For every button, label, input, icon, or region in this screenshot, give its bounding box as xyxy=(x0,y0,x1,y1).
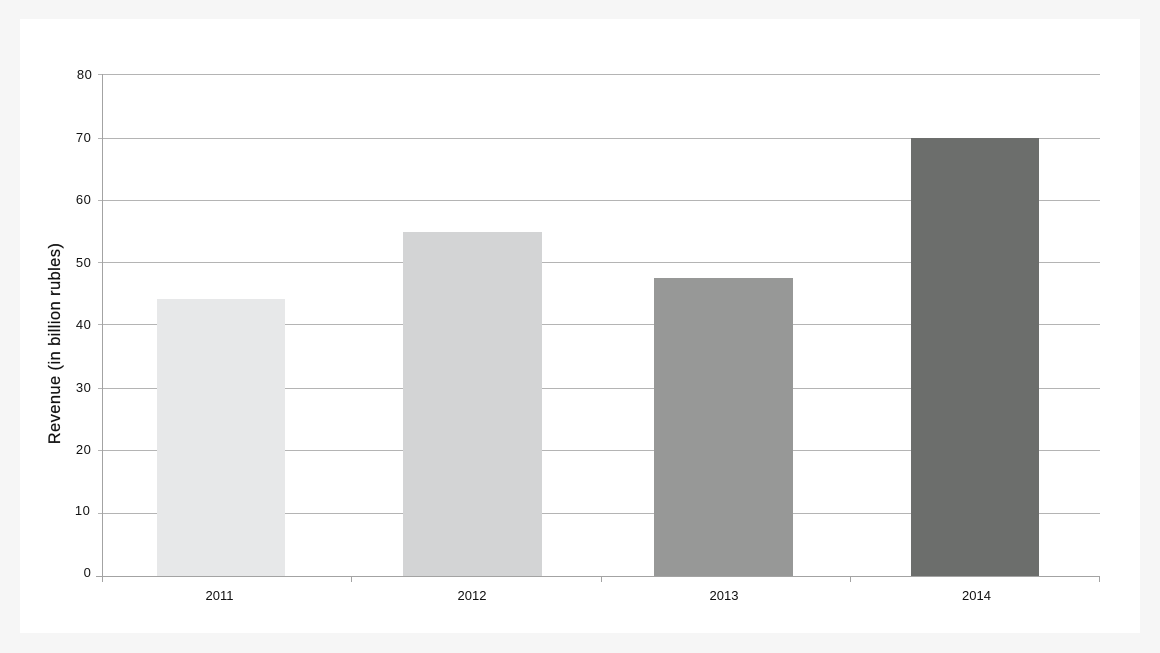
y-axis tick labels: 80 xyxy=(77,67,92,82)
axes xyxy=(96,74,1100,582)
bar chart xyxy=(46,67,1100,603)
x-axis tick labels: 2011 xyxy=(206,588,233,603)
x-axis tick labels: 2013 xyxy=(710,588,738,603)
y-axis tick labels: 50 xyxy=(76,255,92,270)
x-axis tick labels xyxy=(206,588,991,603)
y-axis tick labels: 30 xyxy=(76,380,92,395)
y-axis title: Revenue (in billion rubles) xyxy=(46,243,64,444)
x-axis tick labels: 2014 xyxy=(962,588,991,603)
y-axis tick labels: 60 xyxy=(76,192,92,207)
y-axis tick labels: 10 xyxy=(75,503,90,518)
y-axis tick labels: 20 xyxy=(76,442,92,457)
y-axis tick labels: 70 xyxy=(76,130,92,145)
bar: 2013 xyxy=(654,278,793,576)
bar: 2014 xyxy=(911,138,1039,576)
y-axis tick labels xyxy=(75,67,92,580)
bar: 2011 xyxy=(157,299,285,576)
x-axis tick labels: 2012 xyxy=(458,588,486,603)
y-axis tick labels: 0 xyxy=(84,565,92,580)
bar: 2012 xyxy=(403,232,542,576)
y-axis tick labels: 40 xyxy=(76,317,92,332)
